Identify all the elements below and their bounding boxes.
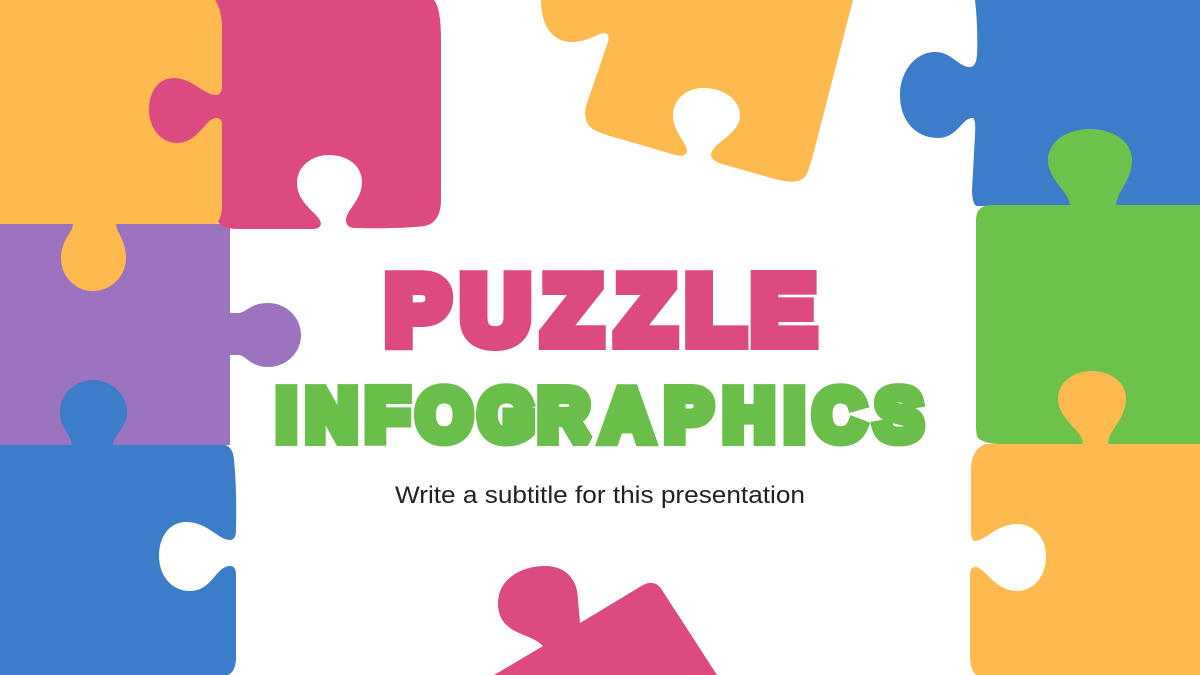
puzzle piece: yellow bottom right [970, 371, 1200, 675]
subtitle: Write a subtitle for this presentation [395, 482, 805, 509]
puzzle piece: yellow top centre [541, 0, 853, 182]
puzzle piece: blue top right [900, 0, 1200, 206]
puzzle piece: purple left [0, 224, 301, 445]
puzzle piece: green right [976, 129, 1200, 444]
puzzle piece: blue bottom left [0, 380, 236, 675]
title: PUZZLE: PUZZLE [386, 257, 815, 364]
puzzle piece: pink bottom centre [494, 566, 717, 675]
puzzle piece: pink top left [149, 0, 441, 229]
puzzle piece: yellow top left [0, 0, 222, 291]
title: INFOGRAPHICS: INFOGRAPHICS [277, 375, 922, 456]
